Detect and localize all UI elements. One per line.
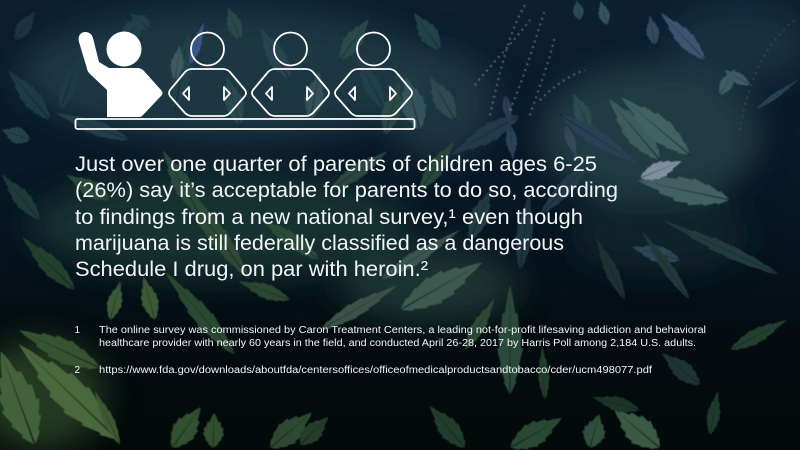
main text block: Schedule I drug, on par with heroin.²: [75, 258, 428, 281]
icon: table bar: [76, 119, 414, 129]
footnotes: https://www.fda.gov/downloads/aboutfda/centersoffices/officeofmedicalproductsandtobacco/cder/ucm498077.pdf: [99, 365, 652, 376]
main text block: (26%) say it’s acceptable for parents to do so, according: [75, 179, 618, 202]
icon: outlined person 3: [335, 32, 412, 116]
text-area leaves: [165, 169, 258, 286]
bottom-right leaves: [392, 250, 490, 323]
main text block: to findings from a new national survey,¹ even though: [75, 206, 583, 229]
footnotes: 1: [74, 325, 80, 336]
bud with frosted specks: [475, 5, 585, 115]
footnotes: healthcare provider with nearly 60 years in the field, and conducted April 26-28, 2017 by Harris Poll among 2,184 U.S. adults.: [99, 338, 696, 349]
main text block: marijuana is still federally classified as a dangerous: [75, 232, 564, 255]
footnotes: 2: [74, 365, 80, 376]
main text block: Just over one quarter of parents of children ages 6-25: [75, 153, 597, 176]
footnotes: The online survey was commissioned by Caron Treatment Centers, a leading not-for-profit lifesaving addiction and behavioral: [99, 325, 706, 336]
footnotes: [74, 325, 706, 376]
top-left leaves: [1, 64, 58, 126]
bottom-left leaves: [0, 344, 54, 450]
icon: outlined person 2: [252, 32, 329, 116]
top-right leaves: [599, 90, 670, 168]
icon: person raising hand (filled): [79, 32, 162, 117]
icon: outlined person 1: [169, 32, 246, 116]
